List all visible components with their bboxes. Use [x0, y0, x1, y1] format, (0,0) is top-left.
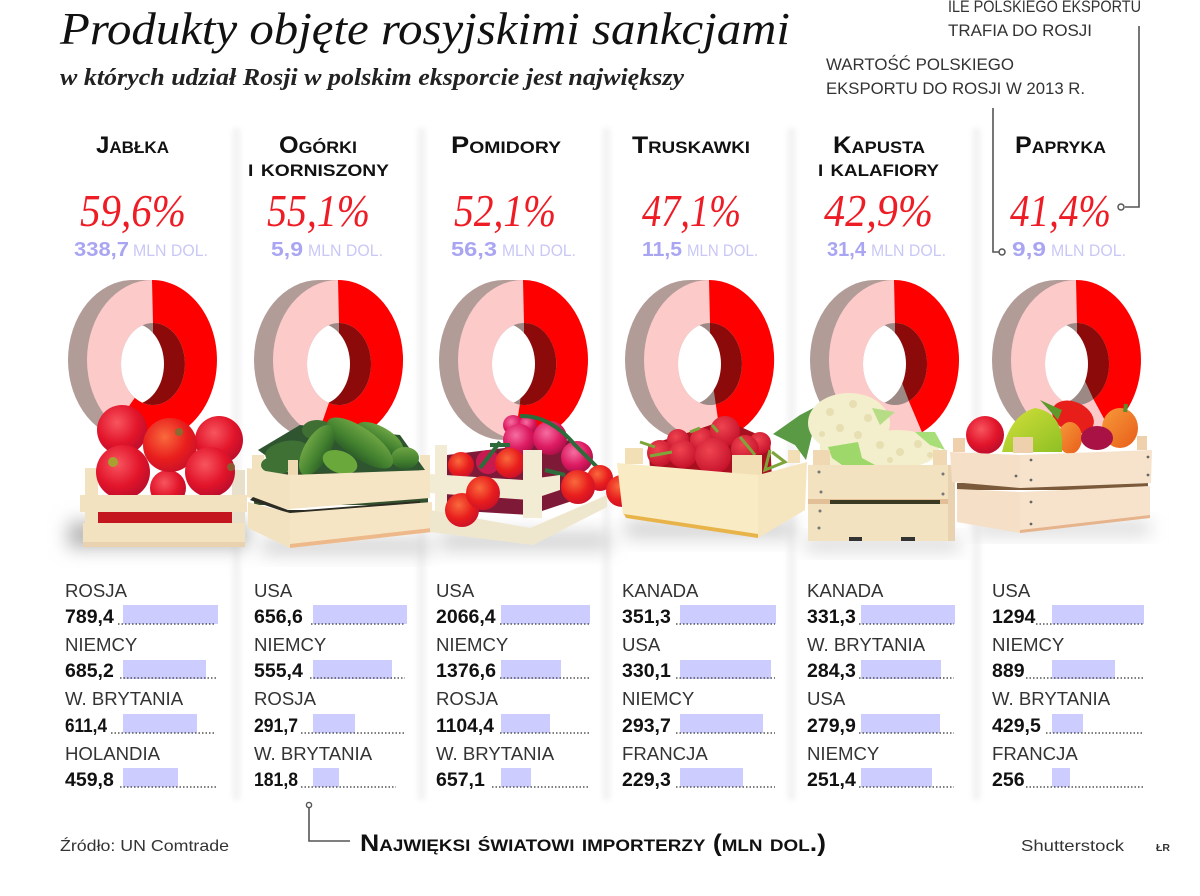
top importers list: 251,4 [807, 769, 856, 791]
heading [248, 132, 390, 182]
export value: MLN DOL. [502, 241, 576, 260]
top importers list: 429,5 [992, 715, 1041, 737]
export value: MLN DOL. [133, 241, 208, 260]
top importers list: 656,6 [254, 606, 303, 628]
legend: share of exports [948, 0, 1141, 210]
heading: Pomidory [451, 132, 562, 159]
export value: 338,7 [74, 239, 129, 261]
top importers list: 2066,4 [436, 606, 496, 628]
title: Produkty objęte rosyjskimi sankcjami [59, 3, 790, 54]
export value [642, 239, 758, 261]
top importers list: USA [622, 634, 661, 655]
top importers list: KANADA [622, 580, 699, 601]
top importers list: FRANCJA [992, 743, 1078, 764]
source: Źródło: UN Comtrade [60, 836, 229, 855]
shadow under crate [805, 538, 960, 550]
top importers list: 229,3 [622, 769, 671, 791]
top importers list: 351,3 [622, 606, 671, 628]
export value [451, 239, 576, 261]
top importers list: ROSJA [65, 580, 128, 601]
export value [271, 239, 383, 261]
top importers list: USA [254, 580, 293, 601]
top importers list: 284,3 [807, 660, 856, 682]
top importers list: W. BRYTANIA [992, 688, 1111, 709]
top importers list: NIEMCY [65, 634, 137, 655]
share percent: 52,1% [454, 185, 556, 236]
legend: export value: WARTOŚĆ POLSKIEGO [826, 55, 1014, 74]
panel: Kapusta i kalafiory [773, 132, 960, 791]
top importers list: FRANCJA [622, 743, 708, 764]
heading: i korniszony [248, 155, 390, 182]
top importers list: 685,2 [65, 660, 114, 682]
donut chart [439, 280, 588, 440]
top importers list: 1104,4 [436, 715, 494, 737]
top importers list: 181,8 [254, 769, 298, 791]
top importers list [65, 580, 218, 791]
top importers list: NIEMCY [622, 688, 694, 709]
heading: i kalafiory [818, 155, 940, 182]
share percent: 55,1% [267, 185, 370, 236]
top importers list: NIEMCY [807, 743, 879, 764]
crate with tomatoes [430, 415, 638, 545]
column separators [233, 128, 980, 800]
legend: export value [826, 55, 1085, 255]
crate with apples [80, 405, 247, 547]
top importers list: USA [807, 688, 846, 709]
donut chart [254, 280, 403, 440]
top importers list: 330,1 [622, 660, 671, 682]
donut chart [68, 280, 217, 440]
top importers list [436, 580, 590, 791]
crate with cucumbers [247, 408, 432, 548]
top importers list [254, 580, 407, 791]
panel: Papryka [950, 132, 1152, 791]
top importers list: HOLANDIA [65, 743, 161, 764]
top importers list: 555,4 [254, 660, 303, 682]
share percent: 47,1% [642, 185, 741, 236]
export value [1012, 239, 1126, 261]
top importers list: 293,7 [622, 715, 671, 737]
export value: MLN DOL. [1051, 241, 1126, 260]
donut chart [992, 280, 1141, 440]
top importers list: NIEMCY [254, 634, 326, 655]
share percent: 42,9% [824, 185, 933, 236]
export value [827, 239, 946, 261]
top importers list: 611,4 [65, 715, 107, 737]
importers legend with connector: Najwięksi światowi importerzy (mln dol.) [360, 830, 826, 857]
top importers list: 279,9 [807, 715, 856, 737]
author initials: ŁR [1156, 843, 1171, 854]
shadow under crate [262, 538, 432, 554]
top importers list: ROSJA [254, 688, 317, 709]
export value: 9,9 [1012, 239, 1046, 261]
top importers list: ROSJA [436, 688, 499, 709]
shadow under crate [68, 522, 248, 548]
top importers list: USA [436, 580, 475, 601]
panel: Ogórki i korniszony [247, 132, 432, 791]
export value: 31,4 [827, 239, 867, 261]
top importers list: KANADA [807, 580, 884, 601]
donut chart [625, 280, 774, 440]
top importers list: 657,1 [436, 769, 485, 791]
panel: Jabłka [65, 132, 248, 791]
top importers list: NIEMCY [992, 634, 1064, 655]
photo credit: Shutterstock [1021, 838, 1125, 855]
heading: Kapusta [833, 132, 925, 159]
top importers list [992, 580, 1144, 791]
crate with strawberries [617, 416, 807, 538]
shadow under crate [625, 520, 795, 538]
top importers list: 459,8 [65, 769, 114, 791]
top importers list: 1294 [992, 606, 1036, 628]
share percent: 59,6% [80, 185, 186, 236]
crate with cauliflower [773, 393, 955, 541]
export value: MLN DOL. [308, 241, 383, 260]
legend: export value: EKSPORTU DO ROSJI W 2013 R. [826, 79, 1085, 98]
top importers list: 291,7 [254, 715, 298, 737]
subtitle: w których udział Rosji w polskim eksporcie jest największy [60, 65, 684, 91]
top importers list: 889 [992, 660, 1025, 682]
panel: Pomidory [430, 132, 638, 791]
top importers list: W. BRYTANIA [254, 743, 373, 764]
heading: Papryka [1015, 132, 1106, 159]
panel: Truskawki [617, 132, 807, 791]
top importers list: W. BRYTANIA [807, 634, 926, 655]
top importers list [622, 580, 776, 791]
top importers list: 1376,6 [436, 660, 496, 682]
export value: 11,5 [642, 239, 682, 261]
heading [818, 132, 940, 182]
importers legend with connector [306, 802, 826, 857]
legend: share of exports: TRAFIA DO ROSJI [948, 21, 1092, 40]
export value: 56,3 [451, 239, 497, 261]
heading: Ogórki [279, 132, 357, 159]
top importers list: W. BRYTANIA [65, 688, 184, 709]
export value: MLN DOL. [871, 241, 946, 260]
top importers list: 256 [992, 769, 1025, 791]
export value: 5,9 [271, 239, 303, 261]
shadow under crate [975, 522, 1150, 534]
shadow under crate [440, 532, 610, 550]
share percent: 41,4% [1010, 185, 1111, 236]
heading: Jabłka [96, 132, 169, 159]
top importers list: 331,3 [807, 606, 856, 628]
donut chart [810, 280, 959, 440]
top importers list [807, 580, 955, 791]
export value: MLN DOL. [687, 241, 758, 260]
top importers list: 789,4 [65, 606, 114, 628]
top importers list: NIEMCY [436, 634, 508, 655]
crate with peppers [950, 394, 1152, 533]
top importers list: USA [992, 580, 1031, 601]
export value [74, 239, 208, 261]
top importers list: W. BRYTANIA [436, 743, 555, 764]
heading: Truskawki [632, 132, 750, 159]
